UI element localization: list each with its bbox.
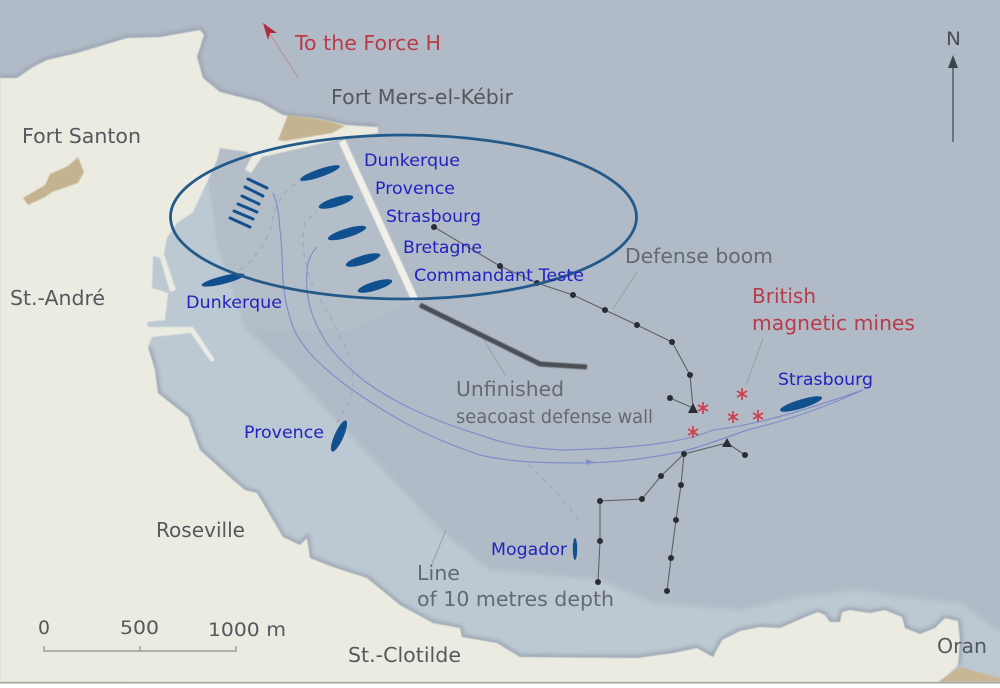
fort mers-el-kebir shape	[278, 115, 345, 141]
annotation labels: Unfinished	[456, 377, 564, 401]
fort santon shape	[23, 157, 84, 205]
ship name labels	[186, 151, 873, 560]
leader lines	[432, 272, 763, 564]
place labels: St.-André	[10, 286, 105, 310]
british magnetic mines markers	[688, 388, 763, 438]
ship name labels: Provence	[375, 179, 455, 199]
ship name labels: Strasbourg	[386, 207, 481, 227]
ship: provence	[328, 419, 350, 453]
ship name labels: Dunkerque	[364, 151, 460, 171]
sand area near Oran	[938, 667, 1000, 682]
ship name labels: Mogador	[491, 540, 567, 560]
north arrow: N	[946, 28, 961, 50]
place labels: Oran	[937, 634, 987, 658]
ship name labels: Strasbourg	[778, 370, 873, 390]
scale bar: 0	[38, 617, 50, 639]
red labels	[294, 31, 915, 335]
ship: strasbourg at sea	[779, 393, 823, 415]
annotation labels: of 10 metres depth	[417, 587, 614, 611]
ship tracks	[273, 193, 863, 465]
shallow water	[130, 180, 1000, 688]
red labels: magnetic mines	[752, 311, 915, 335]
ship name labels: Provence	[244, 423, 324, 443]
ship name labels: Dunkerque	[186, 293, 282, 313]
place labels: Fort Mers-el-Kébir	[331, 85, 514, 109]
dashed tracks	[240, 178, 578, 520]
place labels: Roseville	[156, 518, 245, 542]
annotation labels: Line	[417, 561, 460, 585]
harbour water	[208, 138, 416, 330]
place labels: St.-Clotilde	[348, 643, 461, 667]
annotation labels: Defense boom	[625, 244, 773, 268]
ship: mogador	[573, 538, 577, 560]
annotation labels: seacoast defense wall	[456, 406, 653, 428]
bottom frame	[0, 682, 1000, 688]
arrow: to the force h	[263, 23, 298, 77]
ships in harbour	[201, 162, 394, 296]
scale bar: 1000 m	[208, 619, 286, 641]
place labels: Fort Santon	[22, 124, 141, 148]
north arrow	[946, 28, 961, 142]
seawall white	[342, 141, 415, 300]
annotation labels	[417, 244, 773, 611]
red labels: British	[752, 284, 816, 308]
scale bar: 500	[120, 617, 159, 639]
unfinished seacoast defense wall	[420, 305, 587, 367]
red labels: To the Force H	[294, 31, 441, 55]
scale bar	[38, 617, 286, 651]
highlight ellipse	[170, 135, 636, 299]
ship name labels: Commandant Teste	[414, 266, 584, 286]
defense boom	[431, 224, 748, 594]
destroyers	[230, 179, 267, 227]
ship name labels: Bretagne	[403, 238, 482, 258]
